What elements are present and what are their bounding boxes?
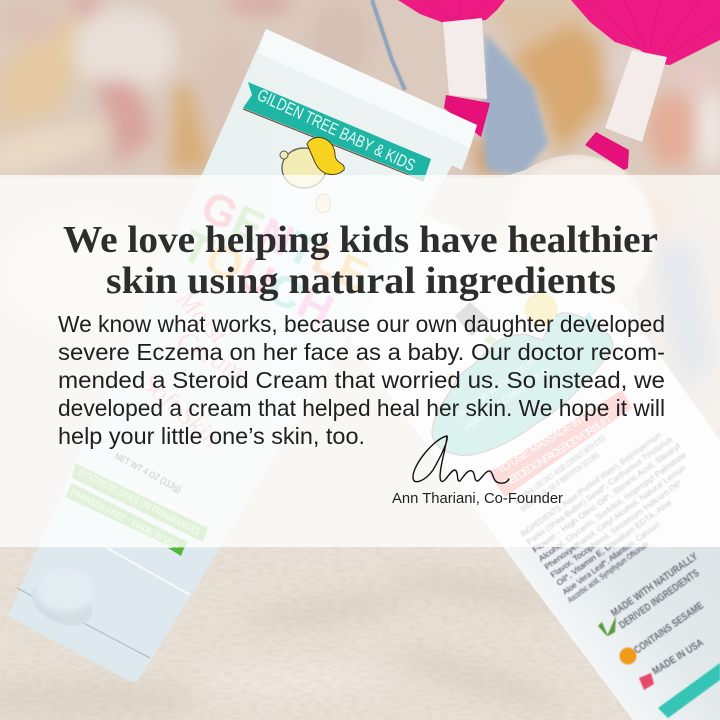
sun and star icons (444, 293, 594, 383)
tube cap lower section (8, 548, 220, 681)
photo background: white plush towel (0, 155, 720, 720)
baby face mascot (280, 137, 344, 213)
green labels: SYNTHETIC DYES OR FRAGRANCES (77, 467, 202, 537)
ingredient text: Oil*, Vitamin E, Disodium EDTA, Aloe (555, 498, 674, 588)
product tube: back (350, 215, 720, 720)
product name: Gentle Touch letters: GENTLE (194, 182, 376, 301)
green labels: PARABEN FREE · MADE IN USA (69, 487, 181, 550)
tube crimp end (258, 29, 477, 148)
ingredient text: Flower - High Oleic Oil*, Stearic Acid, Stearyl (531, 441, 682, 555)
title: We love helping kids have healthier (63, 219, 658, 261)
claims list with icons (598, 551, 706, 690)
ingredient text: EXTERNAL USE ONLY. AVOID CONTACT WITH EYES (513, 434, 607, 506)
product tube: front (8, 29, 477, 681)
script product description: Cream (172, 324, 250, 386)
teal bottom banner (658, 663, 720, 718)
body paragraph: developed a cream that helped heal her skin. We hope it will (58, 395, 665, 421)
tube cap details (17, 548, 190, 658)
body paragraph: severe Eczema on her face as a baby. Our doctor recom- (58, 339, 665, 365)
pink directions strip (488, 390, 632, 497)
signature name: Ann Thariani, Co-Founder (392, 491, 563, 507)
ingredient text: Aloe Vera Leaf*, Allantoin, Calcium (561, 520, 662, 597)
translucent white band (0, 175, 720, 547)
photo background: patterned fabric (0, 0, 720, 460)
ingredient text: DISCONTINUE USE IF IRRITATION OCCURS (519, 450, 601, 514)
body paragraph: help your little one’s skin, too. (58, 423, 365, 449)
tassel left (398, 0, 505, 137)
ingredient text: INGREDIENTS: Aqua (Purified Water), Butyrospermum (519, 430, 664, 539)
script product description: Moist (170, 283, 235, 351)
script product description (136, 283, 250, 453)
signature (413, 436, 509, 483)
net weight: NET WT 4 OZ (113g) (113, 451, 183, 495)
claims list with icons: DERIVED INGREDIENTS (617, 567, 702, 631)
product name: Gentle Touch letters: TOUCH (174, 221, 341, 336)
cloud label: BUTTER WITH NATURAL (455, 350, 546, 420)
teal ribbon banner (243, 82, 431, 181)
claims list with icons: CONTAINS SESAME (632, 600, 706, 656)
product name: Gentle Touch letters (174, 182, 376, 336)
body paragraph: mended a Steroid Cream that worried us. So instead, we (58, 367, 665, 393)
ingredient text: Phenoxyethanol, Cetyl Alcohol, Natural Lemon (543, 463, 687, 572)
ingredient text: Parkii (Shea Butter) Seed*, Carthamus Tinctorius (525, 435, 674, 547)
pink directions strip: NEEDED ON FACE, BODY OR BUTT (502, 413, 615, 490)
ingredient text (513, 430, 688, 605)
title (63, 219, 658, 302)
teal ribbon banner: GILDEN TREE BABY & KIDS (254, 85, 418, 175)
ingredient text: Flavor, Tocopherol, Sesamum Indicum Oil* (549, 478, 684, 580)
script product description: Soft Skin (136, 367, 227, 453)
body paragraph: We know what works, because our own daughter developed (58, 311, 665, 337)
cloud label: VERY DRY CREAM SKIN (461, 364, 551, 434)
pink directions strip: TO USE: MASSAGE IN DAILY (495, 400, 608, 477)
claims list with icons: MADE IN USA (650, 636, 706, 678)
ingredient text: Alcohol, Glycerin, Sorbitol, Isopropyl Palmitate (537, 450, 688, 564)
claims list with icons: MADE WITH NATURALLY (609, 551, 700, 619)
tassel right (571, 0, 720, 170)
cloud label (432, 313, 613, 455)
body paragraph (58, 311, 665, 449)
title: skin using natural ingredients (106, 260, 616, 302)
ingredient text: Ascorbic acid, Symphytum Officinale (566, 539, 651, 605)
